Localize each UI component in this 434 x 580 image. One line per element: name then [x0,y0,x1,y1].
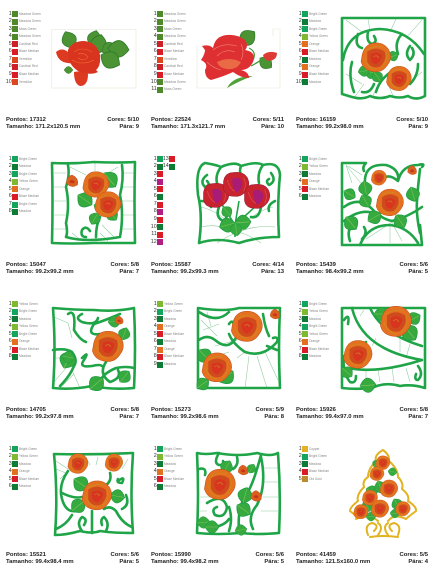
stats [6,117,139,130]
stats: Pontos: 15521 [6,552,46,558]
color list: 6 [154,193,157,199]
design: square with curved bands and two roses [340,306,426,393]
color list: Yellow Green [309,34,328,38]
panel: design 15439 [296,156,428,275]
stats: Pára: 4 [408,559,428,565]
color list: 1 [154,11,157,17]
color list: 2 [154,308,157,314]
panel: design 41459 [290,435,434,580]
color list [145,446,205,491]
color list: 3 [154,316,157,322]
panel: design 15047 [6,156,139,275]
color list: Bright Green [309,302,327,306]
color list: Cardinal Red [19,64,38,68]
stats: Cores: 5/8 [111,262,139,268]
stats [296,262,428,275]
color list: 1 [9,446,12,452]
color list [8,446,39,490]
color list: 4 [9,33,12,39]
color list: 1 [299,301,302,307]
stats: Cores: 5/6 [111,552,139,558]
stats [151,407,284,420]
panel: design 16159 [296,11,428,130]
color list: 2 [9,453,12,459]
color list: 4 [154,33,157,39]
color list: 4 [154,323,157,329]
color list: 4 [299,323,302,329]
color list: Cardinal Red [19,42,38,46]
color list: 6 [154,48,157,54]
stats: Pontos: 15273 [151,407,191,413]
color list: 4 [9,323,12,329]
color list: 5 [154,41,157,47]
color list: Meadow [309,80,321,84]
design: square with rose and vine [145,435,290,580]
color list: Yellow Green [19,179,38,183]
color list: Meadow [164,362,176,366]
stats: Pára: 7 [408,414,428,420]
stats: Tamanho: 99.4x97.0 mm [296,414,364,420]
color list: 7 [154,346,157,352]
stats: Pontos: 15926 [296,407,336,413]
color list: Meadow [309,317,321,321]
color list: Meadow [19,354,31,358]
color list: Moss Green [164,27,181,31]
stats: Pára: 10 [261,124,284,130]
color list: 2 [299,308,302,314]
color list: 7 [9,346,12,352]
color list: Blaze Medium [19,347,39,351]
color list [151,156,163,245]
stats: Pontos: 16159 [296,117,336,123]
color list: Bright Green [309,324,327,328]
color list: Meadow [309,462,321,466]
stats: Tamanho: 99.2x97.8 mm [6,414,74,420]
color list: 7 [154,201,157,207]
color list: 5 [154,476,157,482]
color list: 4 [299,33,302,39]
color list: Orange [309,179,320,183]
color list: Old Gold [309,477,322,481]
color list: Bright Green [19,332,37,336]
color list: Yellow Green [164,302,183,306]
color list: 4 [299,178,302,184]
color list: 6 [299,338,302,344]
color list: Vermilion [19,80,32,84]
color list [298,156,329,200]
stats: Pára: 5 [119,559,139,565]
color list: 3 [299,316,302,322]
color list: Blaze Medium [164,354,184,358]
stats [6,407,139,420]
panel: design 15990 [145,435,290,580]
color list: Meadow Green [19,19,41,23]
color list: Vermilion [164,57,177,61]
stats: Cores: 5/6 [400,262,428,268]
stats: Tamanho: 99.2x99.3 mm [151,269,219,275]
color list: 6 [9,48,12,54]
color list: 8 [154,63,157,69]
color list: Meadow [164,339,176,343]
color list: 7 [299,56,302,62]
color list: 6 [154,338,157,344]
color list: Blaze Medium [309,347,329,351]
color list: 7 [9,201,12,207]
color list: second column [163,156,175,170]
color list: 6 [9,338,12,344]
color list: Meadow Green [164,80,186,84]
color list: Blaze Medium [309,49,329,53]
color list: Bright Green [309,157,327,161]
color list: Cardinal Red [164,64,183,68]
color list: 5 [9,186,12,192]
color list: 5 [299,476,302,482]
color list: 2 [9,18,12,24]
stats: Cores: 5/6 [256,552,284,558]
color list: 1 [9,301,12,307]
color list: Yellow Green [309,309,328,313]
color list [8,156,39,215]
color list: 10 [6,79,12,85]
color list: 10 [151,224,157,230]
color list: 1 [299,156,302,162]
color list: 5 [9,476,12,482]
stats: Pára: 9 [119,124,139,130]
color list [296,11,329,85]
design: square with two roses [340,16,426,100]
color list: Cardinal Red [164,42,183,46]
stats: Cores: 5/8 [400,407,428,413]
stats [151,262,284,275]
design: square with central rose and two buds [52,452,134,536]
stats: Cores: 5/10 [107,117,139,123]
color list: Meadow [309,172,321,176]
color list: Meadow [164,317,176,321]
color list: 7 [9,56,12,62]
design: gold rose tree [290,435,434,580]
stats [296,552,428,566]
color list: Blaze Medium [19,72,39,76]
color list: 5 [9,331,12,337]
color list: second column: 13 [163,156,169,162]
stats [296,117,428,130]
color list: Orange [309,64,320,68]
stats: Tamanho: 99.2x99.2 mm [6,269,74,275]
color list: 9 [154,216,157,222]
color list: 6 [299,48,302,54]
color list: 5 [9,41,12,47]
color list: 9 [299,71,302,77]
color list: Blaze Medium [164,477,184,481]
color list: Meadow [309,354,321,358]
panel: design 15926 [296,301,428,420]
color list: 3 [299,26,302,32]
color list: Meadow [19,484,31,488]
color list: 2 [154,163,157,169]
stats [151,552,284,566]
color list: 1 [154,446,157,452]
color list: Bright Green [19,202,37,206]
color list: 12 [151,239,157,245]
stats [6,262,139,275]
stats [6,552,139,566]
color list: 2 [299,163,302,169]
color list: 1 [299,11,302,17]
color list: 2 [154,453,157,459]
stats: Cores: 4/14 [252,262,284,268]
color list: Bright Green [19,309,37,313]
color list: 3 [9,316,12,322]
color list: Blaze Medium [19,194,39,198]
color list: 5 [154,186,157,192]
color list: Copper [309,447,319,451]
color list: 5 [299,186,302,192]
color list [6,11,41,85]
color list: Moss Green [164,87,181,91]
color list: Vermilion [19,57,32,61]
color list: Orange [19,469,30,473]
color list: 3 [9,171,12,177]
color list: Bright Green [164,447,182,451]
color list: Yellow Green [19,324,38,328]
color list: 5 [299,331,302,337]
stats: Pára: 5 [264,559,284,565]
stats: Pontos: 15439 [296,262,336,268]
color list: 3 [9,461,12,467]
color list: Blaze Medium [309,72,329,76]
color list: 4 [154,178,157,184]
color list: Meadow Green [19,34,41,38]
color list: Bright Green [19,172,37,176]
color list: 1 [299,446,302,452]
color list: Meadow [309,194,321,198]
color list: 8 [299,353,302,359]
color list: Meadow [19,209,31,213]
color list: 3 [299,171,302,177]
stats: Cores: 5/8 [111,407,139,413]
color list: 2 [299,18,302,24]
color list: Bright Green [19,157,37,161]
color list: 6 [299,193,302,199]
stats: Tamanho: 99.2x98.0 mm [296,124,364,130]
color list: 1 [9,156,12,162]
panel: design 15521 [6,446,139,565]
color list: 5 [154,331,157,337]
color list: Orange [19,187,30,191]
color list: 1 [9,11,12,17]
panel: design 22524 [151,11,284,130]
color list: Orange [309,339,320,343]
stats: Cores: 5/9 [256,407,284,413]
color list: Blaze Medium [309,187,329,191]
color list: 8 [154,208,157,214]
design: square with heart scroll and rose [340,162,425,246]
stats: Pontos: 15587 [151,262,191,268]
color list: Meadow [19,462,31,466]
color list: 5 [299,41,302,47]
color list: 8 [154,353,157,359]
color list: second column: 14 [163,163,169,169]
panel: design 17312 [6,11,139,130]
color list: 7 [299,346,302,352]
color list [8,301,39,360]
color list [151,11,186,93]
stats: Tamanho: 99.4x98.4 mm [6,559,74,565]
color list: Yellow Green [19,302,38,306]
color list [290,446,350,483]
color list: 1 [154,301,157,307]
color list: Yellow Green [309,164,328,168]
color list: 11 [151,86,157,92]
stats: Cores: 5/10 [396,117,428,123]
color list [154,301,184,368]
color list: 8 [9,63,12,69]
design: square with two diagonal roses [196,306,282,390]
design: red rose [51,29,136,88]
stats: Pára: 7 [119,269,139,275]
color list: Meadow Green [164,12,186,16]
stats: Pára: 7 [119,414,139,420]
color list: 6 [9,193,12,199]
panel: design 14705 [6,301,139,420]
color list: Meadow [309,19,321,23]
color list: 3 [154,26,157,32]
color list: Meadow [309,57,321,61]
color list: 10 [151,79,157,85]
color list: 9 [154,361,157,367]
stats: Pontos: 15990 [151,552,191,558]
color list: 1 [154,156,157,162]
stats: Pontos: 22524 [151,117,191,123]
color list: Orange [164,324,175,328]
color list: Blaze Medium [19,477,39,481]
color list: Moss Green [19,27,36,31]
color list: Yellow Green [19,454,38,458]
color list: Bright Green [19,447,37,451]
color list: 7 [154,56,157,62]
design: square with three crimson roses [196,162,282,244]
stats: Pontos: 14705 [6,407,46,413]
color list: Meadow [164,484,176,488]
color list: Meadow [19,164,31,168]
color list: Meadow Green [19,12,41,16]
color list: Yellow Green [309,332,328,336]
color list: 4 [9,468,12,474]
stats: Pára: 13 [261,269,284,275]
color list: Bright Green [309,27,327,31]
design: square with two roses and bud [50,160,136,245]
color list: 3 [9,26,12,32]
color list: 3 [154,171,157,177]
color list: Orange [164,347,175,351]
design: red rose with bud [196,28,280,88]
color list: Blaze Medium [164,72,184,76]
stats: Pára: 8 [264,414,284,420]
color list: 4 [9,178,12,184]
stats: Tamanho: 171.2x120.5 mm [6,124,80,130]
color list: Blaze Medium [164,49,184,53]
stats: Tamanho: 99.4x98.2 mm [151,559,219,565]
stats: Pára: 9 [408,124,428,130]
color list: Meadow [164,462,176,466]
panel: design 15587 [151,156,284,275]
stats: Tamanho: 98.4x99.2 mm [296,269,364,275]
color list: Meadow [19,317,31,321]
stats: Tamanho: 171.3x121.7 mm [151,124,225,130]
stats: Pontos: 41459 [296,552,336,558]
color list: 3 [154,461,157,467]
stats: Tamanho: 121.5x160.0 mm [296,559,370,565]
color list: Blaze Medium [309,469,329,473]
color list: 9 [154,71,157,77]
color list: Blaze Medium [164,332,184,336]
stats: Pontos: 15047 [6,262,46,268]
color list: Yellow Green [164,454,183,458]
color list: 2 [154,18,157,24]
color list: 4 [299,468,302,474]
stats [296,407,428,420]
color list: 4 [154,468,157,474]
design: square with rose at right [52,306,136,391]
color list: Bright Green [309,454,327,458]
color list: 8 [9,353,12,359]
stats: Cores: 5/5 [400,552,428,558]
color list [298,301,329,360]
color list: Bright Green [309,12,327,16]
color list: 2 [9,163,12,169]
color list: 6 [154,483,157,489]
color list: 9 [9,71,12,77]
color list: 8 [299,63,302,69]
panel: design 15273 [151,301,284,420]
stats: Pára: 5 [408,269,428,275]
color list: Blaze Medium [19,49,39,53]
color list: 3 [299,461,302,467]
color list: Orange [19,339,30,343]
stats [151,117,284,130]
color list: Bright Green [164,309,182,313]
color list: 2 [299,453,302,459]
color list: 10 [296,79,302,85]
stats: Pontos: 17312 [6,117,46,123]
color list: Orange [164,469,175,473]
color list: 11 [151,231,157,237]
color list: Meadow Green [164,34,186,38]
stats: Cores: 5/11 [253,117,284,123]
color list: 2 [9,308,12,314]
color list: 8 [9,208,12,214]
color list: Meadow Green [164,19,186,23]
stats: Tamanho: 99.2x98.6 mm [151,414,219,420]
color list: 6 [9,483,12,489]
color list: Orange [309,42,320,46]
